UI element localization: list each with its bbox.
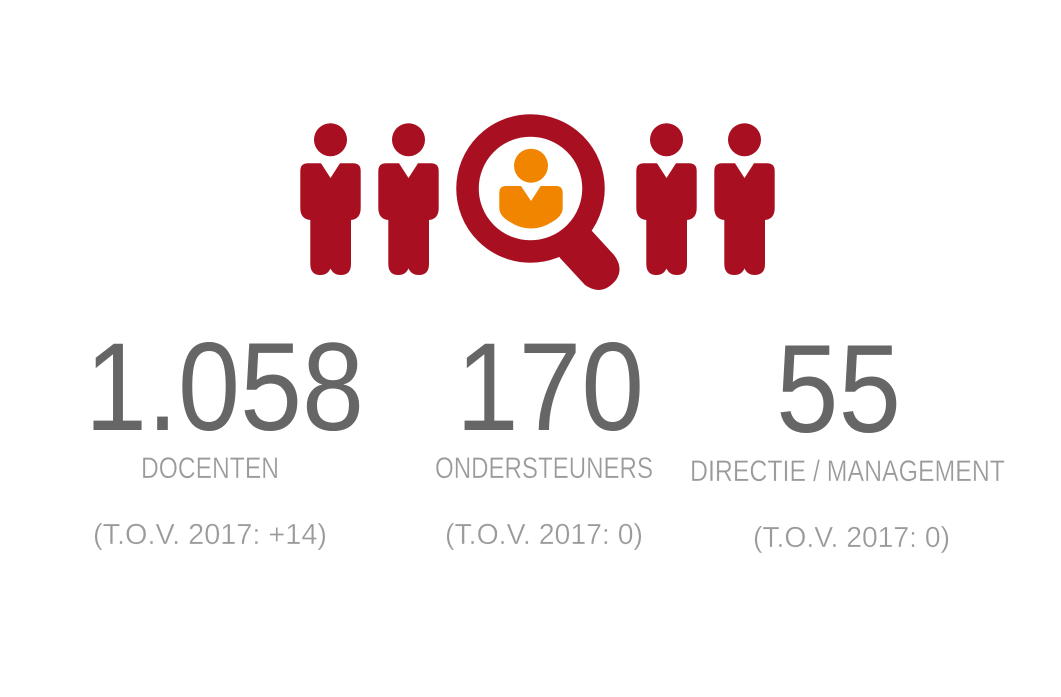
icon: person 2 [378, 123, 439, 275]
comparison: ondersteuners: (T.O.V. 2017: 0) [445, 519, 643, 551]
icon: person 1 [300, 123, 361, 275]
label: ondersteuners: ONDERSTEUNERS [435, 452, 653, 485]
icon: magnifying glass [468, 126, 620, 290]
label: directie / management: DIRECTIE / MANAGEMENT [690, 455, 1005, 488]
number: 55: 55 [776, 320, 901, 459]
stat: ondersteuners [435, 318, 653, 551]
comparison: directie / management: (T.O.V. 2017: 0) [753, 522, 950, 554]
label: docenten: DOCENTEN [141, 452, 279, 485]
stat: directie / management [690, 320, 1005, 554]
icon: person 4 [714, 123, 775, 275]
comparison: docenten: (T.O.V. 2017: +14) [93, 519, 327, 551]
number: 170: 170 [456, 318, 644, 457]
icon: orange person [499, 149, 563, 228]
number: 1.058: 1.058 [85, 318, 364, 457]
icon: person 3 [636, 123, 697, 275]
stat: docenten [85, 318, 364, 551]
icon: people and magnifying glass [300, 123, 775, 290]
